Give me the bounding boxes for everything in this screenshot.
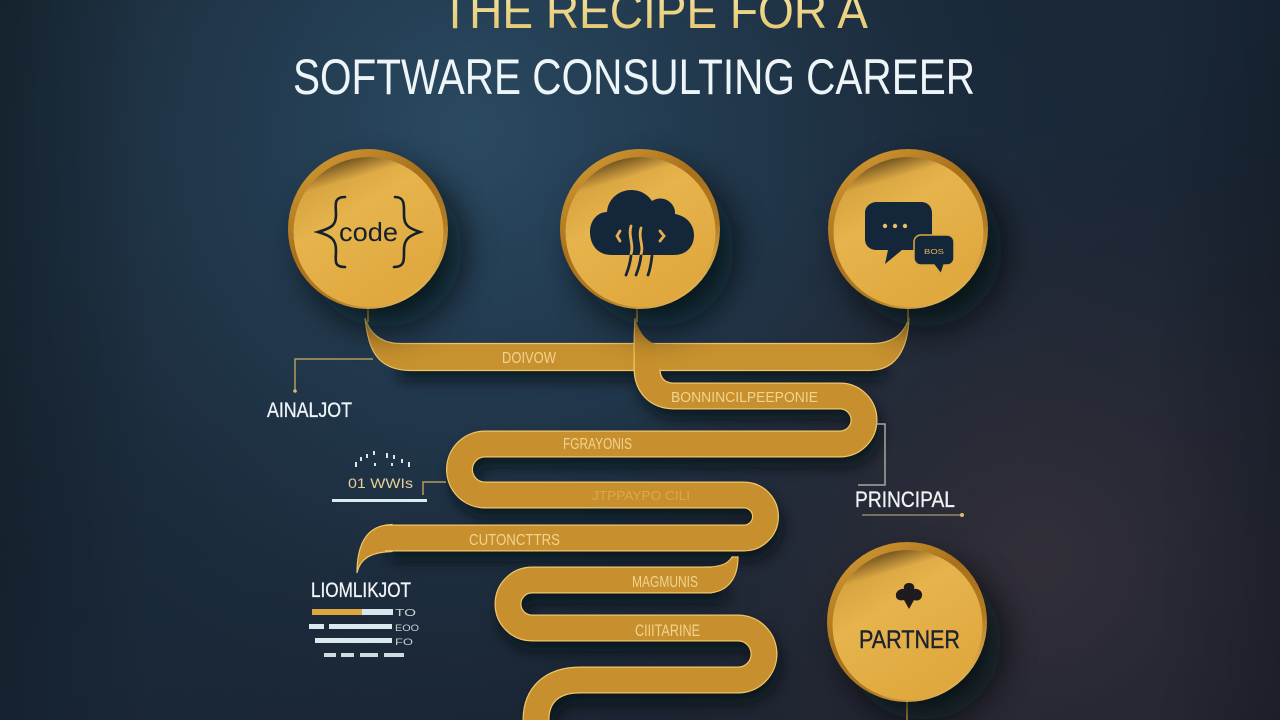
label: CUTONCTTRS — [469, 532, 560, 549]
ribbon 2 junction with upper branch — [655, 344, 672, 370]
connector — [423, 482, 446, 495]
career path ribbons — [357, 318, 909, 720]
icon: cloud — [590, 190, 694, 275]
label: CIIITARINE — [635, 621, 700, 640]
bar row 3: FO — [395, 637, 413, 647]
icon: speech bubbles — [865, 202, 954, 274]
label: LIOMLIKJOT — [311, 579, 411, 602]
label: JTPPAYPO CILI — [592, 488, 690, 503]
ribbon 2 tail taper — [357, 524, 392, 573]
ribbon labels — [469, 350, 818, 640]
label: BONNINCILPEEPONIE — [671, 389, 818, 406]
label: 01 WWIs — [348, 475, 413, 491]
connector dot — [293, 389, 297, 393]
callout: principal — [855, 424, 964, 517]
ribbon 2 left edge highlight — [634, 318, 635, 352]
icon: code braces — [318, 197, 420, 267]
icon: partner emblem — [896, 583, 922, 609]
connector — [295, 359, 373, 390]
ribbon shadows — [389, 355, 884, 720]
icon: dots arc — [355, 451, 410, 467]
circle: partner — [827, 542, 1001, 720]
ribbon 2: main winding path — [385, 345, 864, 538]
connector — [858, 424, 885, 485]
label: MAGMUNIS — [632, 574, 698, 591]
label: PRINCIPAL — [855, 487, 955, 512]
label: FGRAYONIS — [563, 436, 632, 453]
label: DOIVOW — [502, 350, 557, 367]
ribbon 3 top taper — [706, 557, 738, 593]
bar row 1: TO — [395, 608, 416, 619]
icon: code braces: code — [339, 217, 398, 247]
underline — [862, 514, 961, 516]
ribbon 3: lower winding path — [508, 580, 764, 720]
callout: small icon and label — [332, 451, 446, 502]
bar row 4 — [324, 653, 404, 657]
end dot — [960, 513, 964, 517]
icon: speech bubbles: BOS — [924, 247, 944, 256]
bar row 2: EOO — [395, 623, 419, 633]
stems — [368, 306, 908, 720]
label: AINALJOT — [267, 399, 352, 422]
ribbon 1: upper branch — [365, 318, 909, 370]
title — [293, 0, 975, 105]
circle: cloud — [560, 149, 734, 327]
circle: chat — [828, 149, 1002, 327]
partner label: PARTNER — [859, 626, 960, 654]
circle: code — [288, 149, 462, 327]
ribbon 2 top taper — [634, 318, 656, 352]
underline — [332, 499, 427, 502]
callout: analyst — [267, 359, 373, 422]
title line 2: SOFTWARE CONSULTING CAREER — [293, 49, 975, 105]
callout: bar list — [309, 579, 419, 657]
